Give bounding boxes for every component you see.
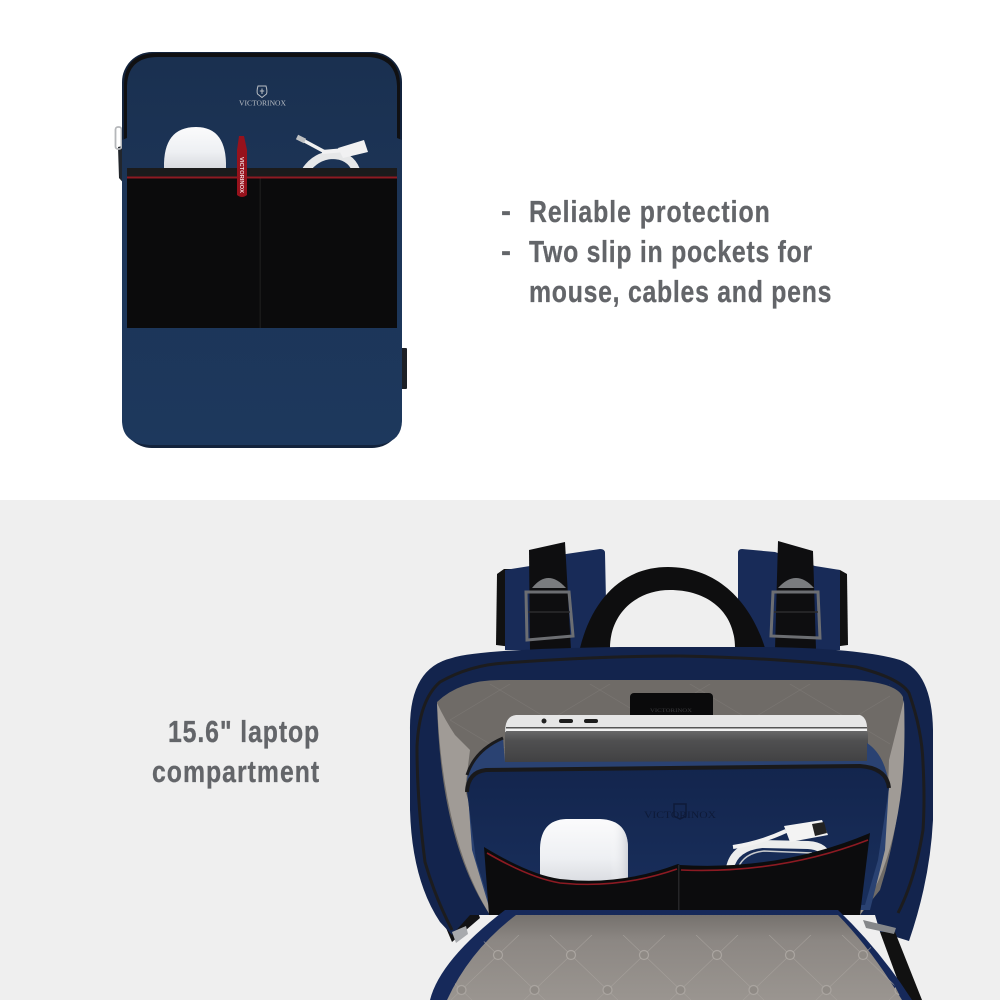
- laptop compartment label: compartment: [152, 754, 319, 789]
- right lining side: [860, 700, 904, 915]
- red pen: [237, 136, 247, 197]
- sleeve side label tab: [401, 348, 407, 389]
- pocket red piping: [127, 176, 397, 178]
- open lid navy trim: [430, 910, 912, 1000]
- compartment lining: [437, 680, 904, 915]
- pouch logo: VICTORINOX: [644, 810, 717, 820]
- sleeve feature text: mouse, cables and pens: [529, 274, 831, 309]
- pouch logo: [644, 804, 717, 820]
- sleeve black top edge: [124, 53, 400, 140]
- mouse in pouch: [540, 819, 628, 884]
- mouse in sleeve pocket: [164, 127, 226, 168]
- cable in sleeve pocket: [297, 137, 368, 170]
- sleeve feature text: -: [501, 233, 511, 268]
- sleeve logo: VICTORINOX: [239, 98, 287, 108]
- organizer pouch: [467, 738, 889, 910]
- backpack handle: [580, 567, 765, 648]
- red pen: VICTORINOX: [238, 157, 244, 194]
- open lid lining: [447, 915, 902, 1000]
- rear body edge left: [432, 890, 480, 942]
- sleeve feature text: [501, 193, 831, 309]
- sleeve feature text: Reliable protection: [529, 194, 770, 229]
- pocket seam: [260, 178, 261, 328]
- right lid black edge: [880, 932, 922, 1000]
- sleeve feature text: Two slip in pockets for: [529, 234, 812, 269]
- laptop in compartment: [505, 715, 868, 772]
- lid lining pattern: [451, 935, 900, 1000]
- laptop sleeve product: [116, 52, 407, 448]
- id card slot: VICTORINOX: [650, 709, 693, 714]
- sleeve navy front: [122, 57, 402, 445]
- left lining side: [437, 703, 490, 915]
- sleeve zip pull: [116, 127, 127, 187]
- cable in pouch: [730, 820, 828, 868]
- sleeve feature text: -: [501, 193, 511, 228]
- pocket top band: [127, 168, 397, 177]
- main zipper: [417, 656, 924, 930]
- left shoulder strap: [496, 542, 607, 650]
- backpack navy shell: [410, 647, 933, 941]
- sleeve black pocket: [127, 168, 397, 328]
- lining pattern: [450, 684, 890, 754]
- black mesh pocket: [484, 833, 870, 915]
- right shoulder strap: [738, 541, 848, 650]
- left zip pull: [452, 926, 468, 943]
- pocket seam: [678, 865, 680, 915]
- laptop compartment label: 15.6" laptop: [168, 714, 319, 749]
- sleeve body: [122, 52, 402, 448]
- open backpack product: [410, 541, 933, 1000]
- sleeve logo: [239, 86, 287, 108]
- laptop compartment label: [152, 714, 319, 789]
- right zip pull: [863, 920, 896, 934]
- id card slot: [630, 693, 713, 723]
- grey lower background panel: [0, 500, 1000, 1000]
- pocket red piping: [487, 840, 868, 884]
